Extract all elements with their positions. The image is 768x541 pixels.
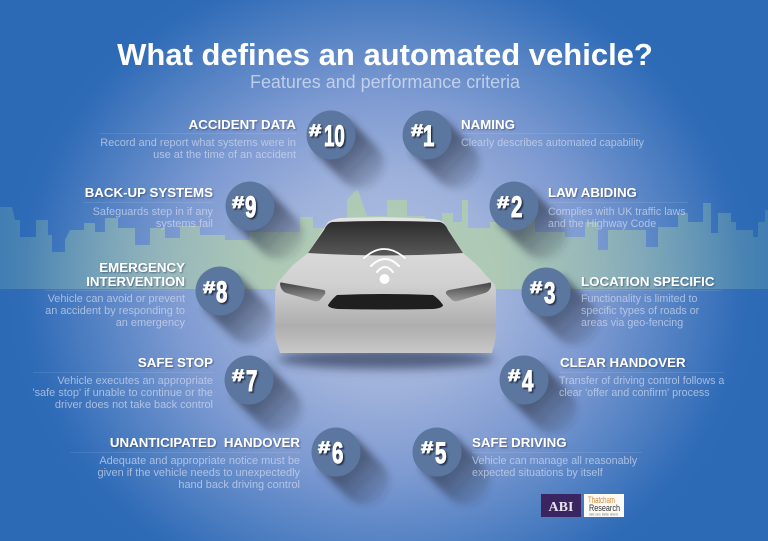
car shadow xyxy=(278,349,494,369)
item 1: naming: NAMING xyxy=(461,117,515,132)
logo: Thatcham Research: Safe cars. Better drivers xyxy=(589,512,618,516)
item 5: safe driving: expected situations by itself xyxy=(472,467,603,479)
item 4: clear handover xyxy=(500,355,725,433)
car body xyxy=(275,217,496,353)
item 3: location specific: LOCATION SPECIFIC xyxy=(581,274,715,289)
item 2: law abiding xyxy=(490,182,688,259)
item 3: location specific: specific types of roads or xyxy=(581,305,700,317)
item 6: unanticipated handover: # xyxy=(318,438,330,457)
item 10: accident data xyxy=(100,110,384,188)
item 6: unanticipated handover: hand back driving control xyxy=(178,479,300,491)
item 2: law abiding: Complies with UK traffic laws xyxy=(548,206,686,218)
item 10: accident data: 10 xyxy=(324,120,345,153)
car xyxy=(275,217,496,369)
item 10: accident data: ACCIDENT DATA xyxy=(189,117,296,132)
item 8: emergency intervention: INTERVENTION xyxy=(86,274,185,289)
item 4: clear handover: clear 'offer and confirm' process xyxy=(559,387,710,399)
item 10: accident data: # xyxy=(309,121,321,140)
item 8: emergency intervention: an accident by responding to xyxy=(45,305,185,317)
item 7: safe stop: # xyxy=(232,366,244,385)
item 5: safe driving: SAFE DRIVING xyxy=(472,435,567,450)
item 3: location specific: 3 xyxy=(544,277,555,310)
item 4: clear handover: 4 xyxy=(522,365,534,398)
item 4: clear handover: Transfer of driving control follows a xyxy=(559,375,724,387)
item 9: back-up systems: 9 xyxy=(245,191,256,224)
item 2: law abiding: # xyxy=(497,193,509,212)
item 8: emergency intervention: # xyxy=(203,278,215,297)
logo: Thatcham Research xyxy=(584,494,624,517)
item 1: naming xyxy=(402,110,645,188)
windshield xyxy=(308,221,463,256)
item 8: emergency intervention: 8 xyxy=(216,276,227,309)
item 3: location specific xyxy=(522,268,721,345)
item 3: location specific: # xyxy=(530,278,542,297)
item 10: accident data: Record and report what systems were in xyxy=(100,137,296,149)
grille xyxy=(328,294,443,310)
item 3: location specific: areas via geo-fencing xyxy=(581,317,683,329)
item 2: law abiding: 2 xyxy=(511,191,522,224)
item 7: safe stop: driver does not take back control xyxy=(55,399,213,411)
item 7: safe stop: 7 xyxy=(246,365,257,398)
item 8: emergency intervention: an emergency xyxy=(116,317,186,329)
item 9: back-up systems: # xyxy=(232,193,244,212)
item 1: naming: 1 xyxy=(423,120,434,153)
item 6: unanticipated handover: UNANTICIPATED HANDOVER xyxy=(110,435,300,450)
item 2: law abiding: LAW ABIDING xyxy=(548,185,637,200)
item 8: emergency intervention: EMERGENCY xyxy=(99,260,185,275)
item 8: emergency intervention: Vehicle can avoid or prevent xyxy=(48,293,185,305)
item 9: back-up systems xyxy=(83,182,303,259)
item 5: safe driving: # xyxy=(421,438,433,457)
title: What defines an automated vehicle? xyxy=(117,37,653,72)
icon: wifi signal xyxy=(364,249,405,284)
item 6: unanticipated handover: Adequate and appropriate notice must be xyxy=(99,455,300,467)
item 7: safe stop: SAFE STOP xyxy=(138,355,213,370)
item 5: safe driving: 5 xyxy=(435,437,446,470)
logo: Thatcham Research: Thatcham xyxy=(588,495,615,505)
item 4: clear handover: CLEAR HANDOVER xyxy=(560,355,686,370)
item 1: naming: # xyxy=(411,121,423,140)
item 7: safe stop xyxy=(32,355,302,433)
item 10: accident data: use at the time of an accident xyxy=(153,149,296,161)
item 6: unanticipated handover: 6 xyxy=(332,437,343,470)
left headlight xyxy=(280,282,325,301)
logo: ABI: ABI xyxy=(549,500,573,515)
item 4: clear handover: # xyxy=(508,366,520,385)
logo: Thatcham Research: Research xyxy=(589,503,620,513)
item 7: safe stop: 'safe stop' if unable to continue or the xyxy=(32,387,213,399)
item 8: emergency intervention xyxy=(45,260,273,344)
right headlight xyxy=(446,282,491,301)
item 5: safe driving: Vehicle can manage all reasonably xyxy=(472,455,638,467)
item 6: unanticipated handover: given if the vehicle needs to unexpectedly xyxy=(98,467,301,479)
item 2: law abiding: and the Highway Code xyxy=(548,218,656,230)
item 9: back-up systems: BACK-UP SYSTEMS xyxy=(85,185,213,200)
city skyline xyxy=(0,190,768,289)
item 1: naming: Clearly describes automated capability xyxy=(461,137,645,149)
subtitle: Features and performance criteria xyxy=(250,72,521,92)
item 5: safe driving xyxy=(412,428,642,505)
item 7: safe stop: Vehicle executes an appropriate xyxy=(57,375,213,387)
item 6: unanticipated handover xyxy=(70,428,389,505)
logo: ABI xyxy=(541,494,581,517)
item 9: back-up systems: Safeguards step in if any xyxy=(93,206,214,218)
item 3: location specific: Functionality is limited to xyxy=(581,293,697,305)
item 9: back-up systems: systems fail xyxy=(156,218,213,230)
